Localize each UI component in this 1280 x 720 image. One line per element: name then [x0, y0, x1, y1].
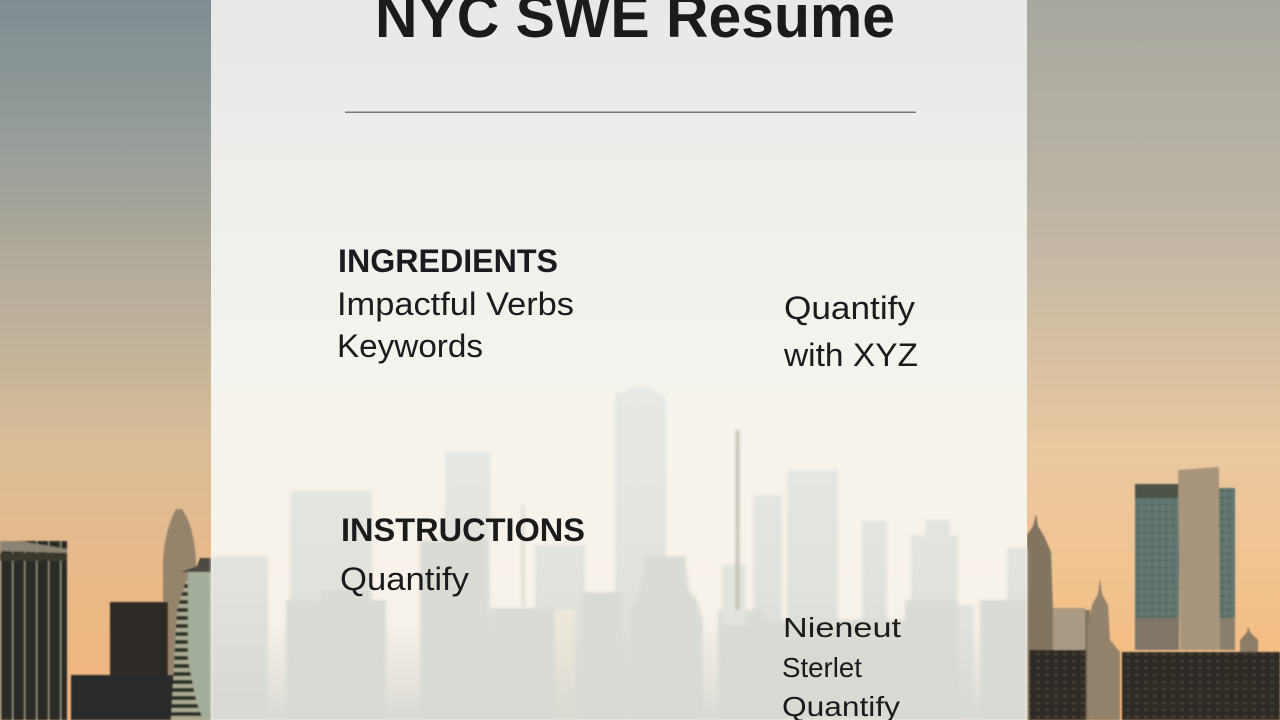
ground haze	[211, 620, 1027, 720]
building: dark foreground left	[1029, 650, 1086, 720]
building: stepped tower	[171, 580, 212, 720]
building: small cupola	[1240, 626, 1258, 660]
building: spire tower	[1027, 514, 1090, 720]
skyline: right buildings	[1027, 467, 1280, 720]
faded skyline inside panel	[211, 388, 1027, 720]
heading: ingredients: INGREDIENTS	[338, 243, 558, 279]
background: left sky	[0, 0, 212, 720]
building: beige core	[1178, 467, 1220, 650]
skyline: left buildings	[0, 509, 212, 720]
item: quantify: Quantify	[340, 561, 469, 597]
building: dark foreground right	[1122, 652, 1280, 720]
note: quantify with XYZ: with XYZ	[783, 337, 918, 373]
building: glass tower left wing	[1135, 484, 1179, 650]
building: glass facade	[188, 572, 212, 720]
item: impactful verbs: Impactful Verbs	[337, 286, 574, 322]
building: dark roof	[181, 558, 212, 572]
note: quantify with XYZ	[783, 290, 918, 373]
section: ingredients	[337, 243, 574, 364]
building: second spire	[1088, 578, 1120, 720]
building: striped tower	[0, 541, 67, 720]
building: mid block	[1053, 608, 1085, 658]
building: dark block	[110, 602, 168, 720]
heading: instructions: INSTRUCTIONS	[341, 512, 585, 548]
note: bottom right list: Nieneut	[783, 612, 901, 643]
item: keywords: Keywords	[337, 328, 483, 364]
building: low block	[71, 675, 176, 720]
note: bottom right list: Sterlet	[782, 652, 862, 683]
building: domed tower	[163, 509, 196, 720]
note: quantify with XYZ: Quantify	[784, 290, 915, 326]
panel: recipe card	[211, 0, 1027, 720]
background: right sky	[1027, 0, 1280, 720]
building: glass tower right wing	[1218, 488, 1235, 650]
note: bottom right list	[782, 612, 901, 720]
thin antenna	[736, 430, 739, 610]
divider rule	[345, 112, 916, 113]
section: instructions	[340, 512, 585, 597]
